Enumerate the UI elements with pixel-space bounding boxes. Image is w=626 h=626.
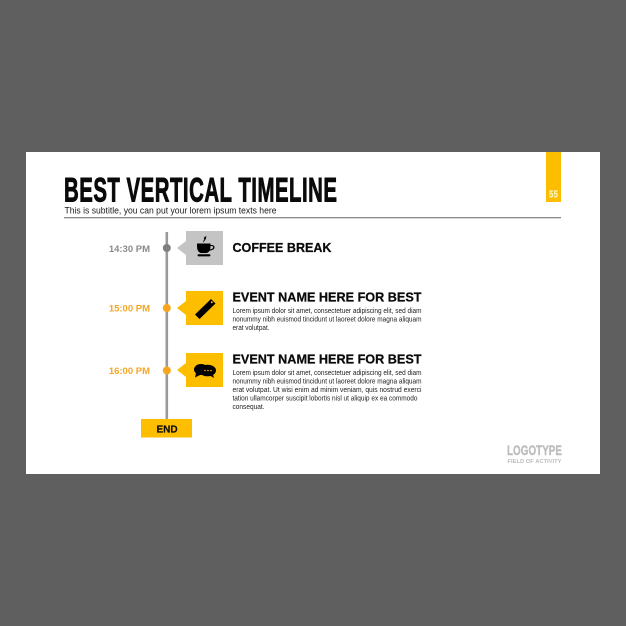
page number tab	[546, 152, 561, 202]
event body text	[232, 308, 422, 332]
timeline dot	[163, 244, 171, 252]
subtitle: This is subtitle, you can put your lorem ipsum texts here	[64, 206, 276, 216]
time label: 15:00 PM	[109, 304, 150, 314]
event body text: nonummy nibh euismod tincidunt ut laoreet dolore magna aliquam	[232, 378, 422, 386]
end marker: END	[156, 424, 178, 436]
event body text	[232, 370, 422, 411]
logotype: FIELD OF ACTIVITY	[508, 459, 562, 465]
event body text: tation ullamcorper suscipit lobortis nisl ut aliquip ex ea commodo	[232, 396, 418, 402]
event heading: COFFEE BREAK	[232, 240, 332, 255]
timeline entry: 16:00	[109, 352, 422, 411]
event heading: EVENT NAME HERE FOR BEST	[232, 352, 422, 366]
timeline dot	[163, 304, 171, 312]
end marker	[141, 419, 192, 438]
time label: 16:00 PM	[109, 366, 150, 377]
event body text: Lorem ipsum dolor sit amet, consectetuer adipiscing elit, sed diam	[232, 370, 422, 377]
title: BEST VERTICAL TIMELINE	[64, 171, 337, 209]
icon box: speech bubbles	[177, 353, 223, 387]
panel: white slide	[26, 152, 600, 474]
time label: 14:30 PM	[109, 244, 150, 255]
logotype: LOGOTYPE	[507, 442, 562, 458]
icon box: ruler	[177, 291, 223, 325]
event body text: erat volutpat.	[232, 325, 270, 332]
event body text: erat volutpat. Ut wisi enim ad minim veniam, quis nostrud exerci	[232, 387, 422, 394]
timeline dot	[163, 366, 171, 374]
timeline entry: 15:00	[109, 290, 422, 332]
timeline entry: 14:30	[109, 231, 332, 265]
icon box: coffee cup	[177, 231, 223, 265]
page number tab: 55	[549, 189, 558, 200]
event heading: EVENT NAME HERE FOR BEST	[232, 290, 422, 304]
timeline vertical line	[166, 232, 168, 420]
event body text: Lorem ipsum dolor sit amet, consectetuer adipiscing elit, sed diam	[232, 308, 422, 315]
event body text: consequat.	[232, 404, 265, 411]
event body text: nonummy nibh euismod tincidunt ut laoreet dolore magna aliquam	[232, 316, 422, 324]
